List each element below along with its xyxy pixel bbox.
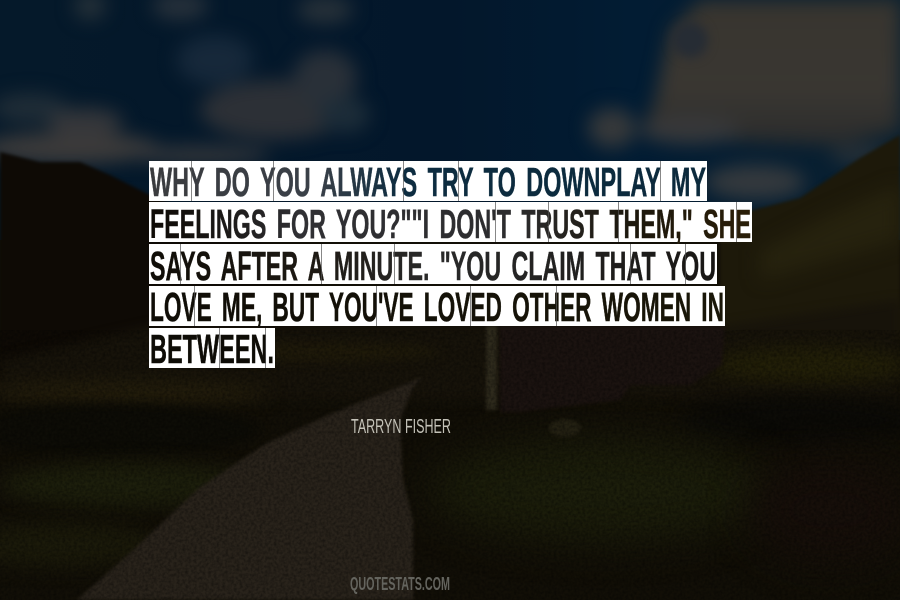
clouds left — [0, 0, 370, 164]
texture overlay — [0, 330, 900, 600]
right hill — [720, 135, 900, 340]
quote line 5: BETWEEN. — [150, 326, 274, 372]
quote line 5 — [149, 326, 275, 372]
author name: TARRYN FISHER — [351, 416, 451, 438]
left hill — [0, 152, 300, 380]
icon: ruined stone wall — [486, 326, 725, 437]
meadow — [0, 300, 900, 400]
quote block — [149, 159, 752, 372]
icon: gravel path — [77, 377, 423, 600]
clouds right — [588, 0, 900, 199]
watermark: QUOTESTATS.COM — [350, 574, 450, 594]
